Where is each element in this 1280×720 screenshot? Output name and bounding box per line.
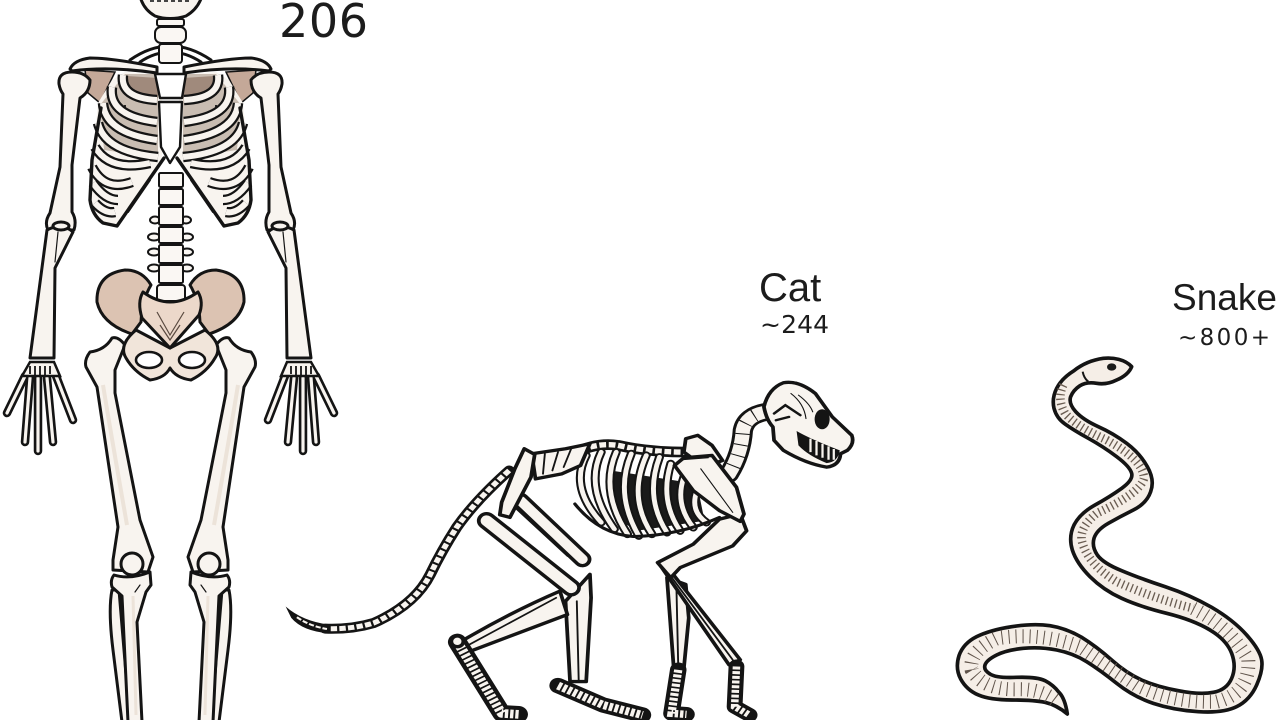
snake [957,358,1262,714]
cat skeleton [286,382,853,715]
label: snake [1172,277,1277,351]
front feet [671,666,750,715]
hind lower leg rear [464,591,567,651]
lumbar spine of cat [532,444,590,479]
label: cat: ~244 [760,310,829,339]
hind foot front [558,686,643,715]
front upper arm [658,514,747,578]
jaw and teeth [797,431,840,463]
near hind femur [487,521,571,588]
teeth [150,0,192,2]
upper scales [1060,385,1193,608]
neck of cat [729,412,767,474]
front lower leg bones [659,564,740,668]
skull base [140,0,202,18]
label: cat [759,266,829,339]
label: snake: Snake [1172,277,1277,318]
tail [286,470,509,633]
label: snake: ~800+ [1178,325,1270,351]
snake eye [1107,363,1116,371]
label: cat: Cat [759,266,821,310]
cat skull [764,382,853,467]
human skeleton [7,0,334,720]
pelvis centre [124,292,218,380]
upper rib arc [130,46,211,62]
thoracic spine [573,445,686,454]
left half of skeleton [7,58,164,720]
snake body [957,358,1262,714]
right half of skeleton [177,58,334,720]
lumbar spine [157,173,185,301]
pelvis of cat [500,449,535,517]
snake head divider [1083,372,1088,382]
lower scales [971,608,1248,703]
hind foot rear [451,636,519,714]
hind lower leg upright [566,574,591,682]
scapula of cat [674,435,744,521]
far hind femur [515,501,582,559]
sternum [155,74,186,163]
neck vertebrae [155,19,186,63]
eye socket [815,409,830,429]
rib cage [575,452,720,536]
